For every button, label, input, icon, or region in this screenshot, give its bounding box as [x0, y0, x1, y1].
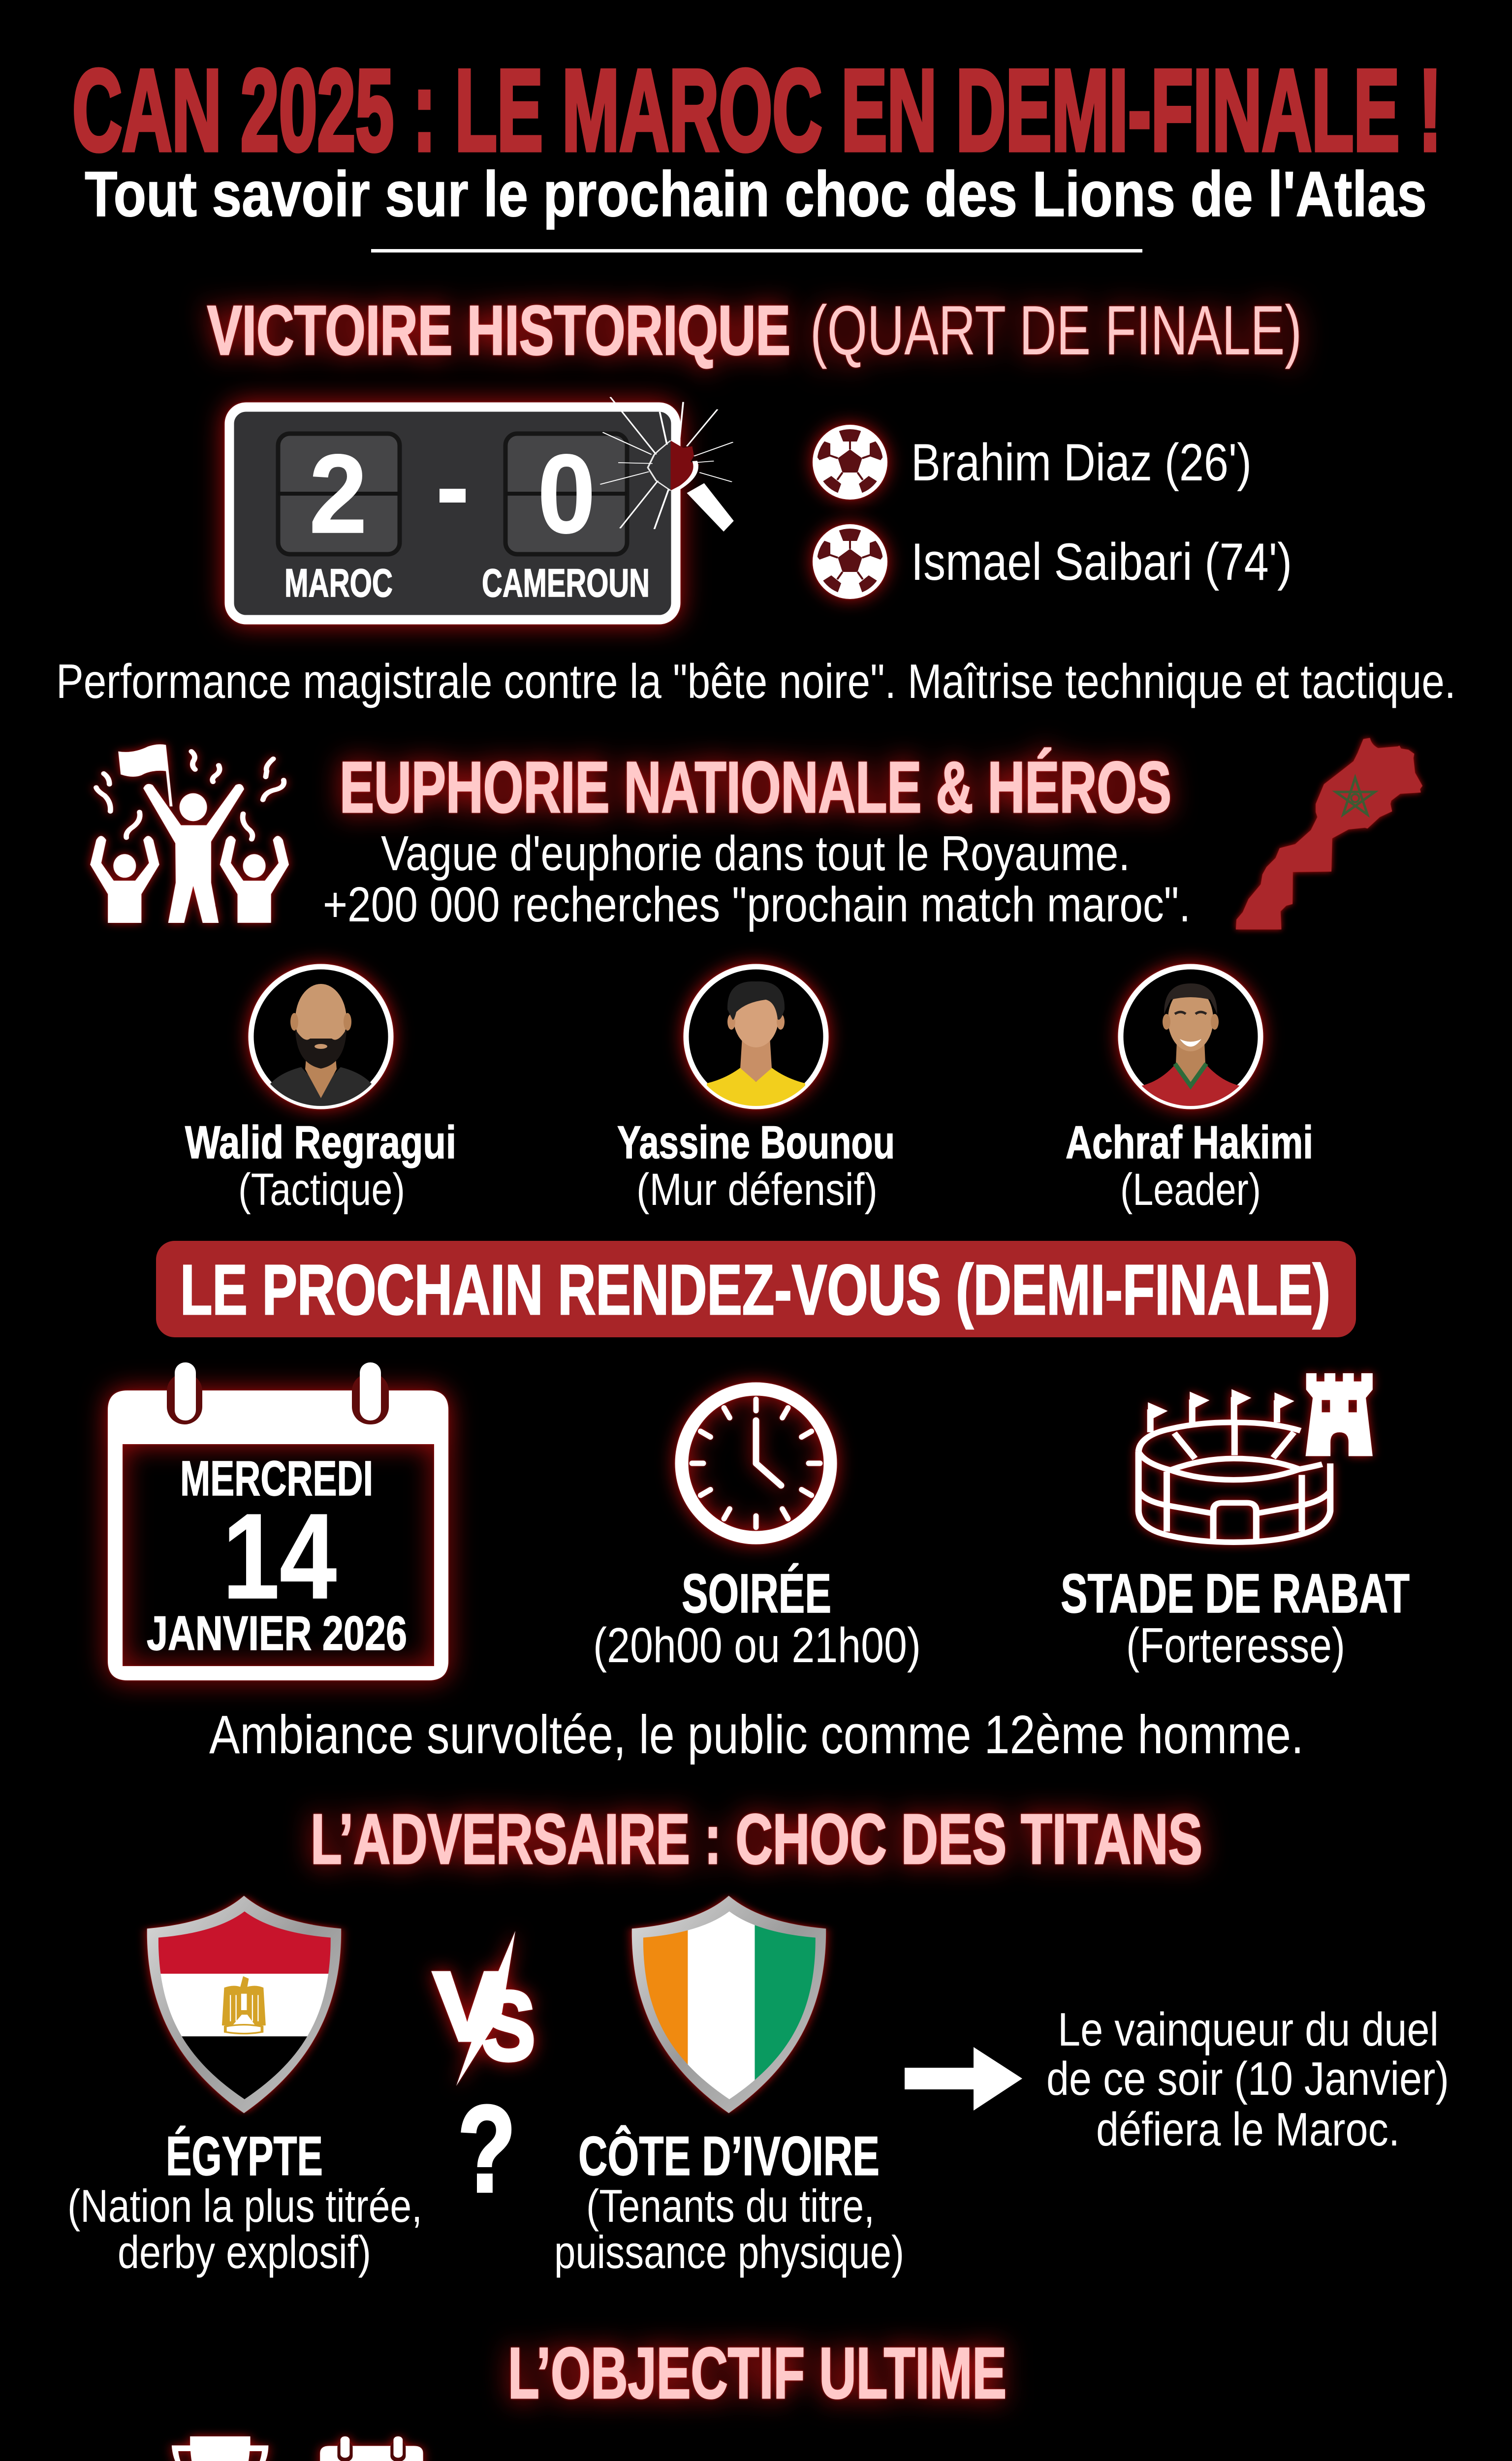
flip card: Maroc score [278, 432, 400, 557]
icon: trophy [172, 2436, 268, 2461]
shield: Egypt [147, 1896, 341, 2113]
weekday: MERCREDI [180, 1451, 373, 1506]
name: Yassine Bounou: Yassine Bounou [617, 1116, 895, 1168]
portrait: Walid Regragui [251, 967, 391, 1110]
calendar rings [167, 1362, 389, 1424]
stadium [1138, 1397, 1330, 1542]
shield: Ivory Coast [632, 1896, 826, 2113]
heading: victoire historique: VICTOIRE HISTORIQUE [207, 291, 790, 370]
name: Achraf Hakimi: Achraf Hakimi [1066, 1116, 1313, 1168]
text: vainqueur line 1: Le vainqueur du duel [1058, 2003, 1439, 2056]
icon: clock [682, 1389, 830, 1538]
team label: Maroc: MAROC [284, 561, 393, 605]
label: Ivory Coast: CÔTE D’IVOIRE [578, 2125, 880, 2187]
Egyptian eagle emblem [222, 1976, 266, 2034]
icon: final calendar [320, 2436, 423, 2461]
text: vainqueur line 2: de ce soir (10 Janvier) [1046, 2052, 1449, 2105]
day number: 14 [222, 1488, 337, 1624]
portrait: Yassine Bounou [686, 967, 826, 1110]
icon: football goal 2 [812, 521, 888, 599]
calendar body [108, 1390, 448, 1680]
icon: versus: S [481, 1971, 536, 2081]
left figure [90, 836, 159, 923]
icon: calendar date [108, 1362, 448, 1680]
label: Egypt: ÉGYPTE [166, 2125, 323, 2187]
heading: victoire historique: (QUART DE FINALE) [810, 291, 1302, 370]
scoreboard frame [229, 407, 676, 620]
scorer: Brahim Diaz: Brahim Diaz (26') [911, 433, 1252, 492]
portrait: Achraf Hakimi [1121, 967, 1260, 1110]
month: JANVIER 2026 [147, 1606, 407, 1660]
icon: hammer cracking the scoreboard [600, 397, 734, 532]
icon: map of Morocco [1236, 738, 1422, 929]
text: horaires: (20h00 ou 21h00) [593, 1618, 921, 1673]
text: vainqueur line 3: défiera le Maroc. [1096, 2103, 1400, 2156]
text: Ivory Coast line 2: puissance physique) [554, 2226, 904, 2278]
flag [118, 744, 172, 806]
name: Walid Regragui: Walid Regragui [185, 1116, 456, 1168]
icon: celebrating crowd [90, 744, 289, 923]
flip card: Cameroun score: 0 [537, 432, 596, 557]
icon: versus [433, 1931, 536, 2086]
text: euphorie line 1: Vague d'euphorie dans tout le Royaume. [381, 826, 1130, 881]
text: Egypt line 1: (Nation la plus titrée, [67, 2180, 422, 2232]
stadium flags [1148, 1389, 1294, 1419]
text: Egypt line 2: derby explosif) [118, 2226, 371, 2278]
team label: Cameroun: CAMEROUN [482, 561, 650, 605]
heading: euphorie: EUPHORIE NATIONALE & HÉROS [340, 747, 1171, 828]
streamers [96, 752, 284, 839]
score dash [440, 489, 466, 503]
icon: stadium and tower [1138, 1373, 1373, 1542]
centre figure [143, 784, 244, 923]
text: ambiance: Ambiance survoltée, le public comme 12ème homme. [209, 1704, 1304, 1765]
icon: football goal 1 [812, 422, 888, 500]
question mark: ? [458, 2080, 516, 2217]
heading: objectif ultime: L’OBJECTIF ULTIME [508, 2333, 1007, 2414]
text: euphorie line 2: +200 000 recherches "prochain match maroc". [323, 877, 1191, 932]
label: soiree: SOIRÉE [682, 1563, 831, 1624]
scoreboard [229, 397, 734, 620]
heading: adversaire: L’ADVERSAIRE : CHOC DES TITANS [311, 1799, 1202, 1879]
role: mur defensif: (Mur défensif) [636, 1165, 878, 1215]
scorer: Ismael Saibari: Ismael Saibari (74') [911, 532, 1292, 591]
text: forteresse: (Forteresse) [1126, 1618, 1345, 1673]
arrow [905, 2047, 1022, 2111]
flip card: Maroc score: 2 [309, 432, 367, 557]
icon: versus: V [433, 1952, 501, 2061]
role: leader: (Leader) [1120, 1165, 1261, 1215]
flip card: Cameroun score [505, 432, 627, 557]
tower [1306, 1373, 1373, 1456]
role: tactique: (Tactique) [238, 1165, 405, 1215]
text: Ivory Coast line 1: (Tenants du titre, [586, 2180, 875, 2232]
right figure [220, 836, 289, 923]
